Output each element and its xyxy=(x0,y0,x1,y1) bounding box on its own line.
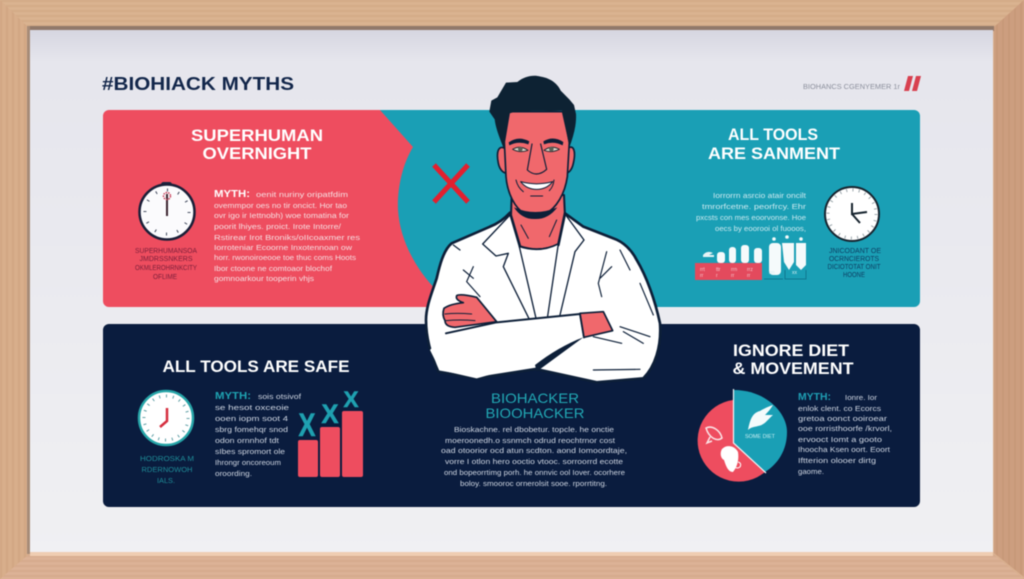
text block: ignore diet myth xyxy=(798,392,892,476)
text block: myth tools safe: Ihrongr oncoreoum xyxy=(215,458,281,467)
heading: ignore diet and movement xyxy=(732,342,854,378)
icon: leaf xyxy=(748,405,773,430)
caption: teal clock: DICIOTOTAT ONIT xyxy=(828,264,881,271)
chart: tool bottles: nn xyxy=(769,270,775,276)
text block: myth superhuman: MYTH: xyxy=(214,189,250,200)
icon: red cross xyxy=(434,165,468,202)
ears xyxy=(497,147,574,173)
icon: wall clock xyxy=(825,187,879,241)
text block: ignore diet myth: Ionre. Ior xyxy=(845,393,877,402)
caption: teal clock: HOONE xyxy=(843,272,865,279)
chart: tool bottles: rr xyxy=(700,273,704,279)
heading: superhuman overnight: OVERNIGHT xyxy=(202,144,312,163)
caption: teal clock: OCRNCIEROTS xyxy=(829,256,879,263)
text block: teal panel: Iorrorrn asrcio atair oncilt xyxy=(713,191,807,200)
chart: tool bottles xyxy=(695,235,806,280)
header tag with red slashes: BIOHANCS CGENYEMER 1r xyxy=(803,82,900,91)
text block: biohacker xyxy=(441,425,627,488)
text block: ignore diet myth: gaome. xyxy=(798,467,824,476)
chart: rising bars with crosses: X xyxy=(322,399,338,429)
eyebrows xyxy=(509,138,563,145)
caption: teal clock xyxy=(828,248,881,279)
text block: myth superhuman: Ibor ctoone ne comtoaor blochof xyxy=(214,264,333,273)
heading: all tools are sanment: ARE SANMENT xyxy=(708,144,841,163)
text block: teal panel: tmrorfcetne. peorfrcy. Ehr xyxy=(702,202,807,211)
text block: myth superhuman: Iorroteniar Ecoorne Inxotennoan ow xyxy=(214,243,353,252)
text block: myth superhuman: Rstirear Irot Broniks/oIIcoaxmer res xyxy=(214,233,360,242)
lab coat xyxy=(426,213,660,382)
text block: ignore diet myth: Ihoocha Ksen oort. Eoort xyxy=(798,445,891,454)
text block: biohacker: boloy. smooroc ornerolsit sooe. rporrtitng. xyxy=(460,479,607,488)
chart: rising bars with crosses: X xyxy=(298,407,316,443)
text block: myth tools safe: ooen iopm soot 4 xyxy=(215,414,288,423)
panel: dark lower band xyxy=(103,324,920,507)
chart: tool bottles: rr xyxy=(747,273,751,279)
icon: movement figure xyxy=(721,446,741,472)
caption: stopwatch: JMDRSSNKERS xyxy=(140,256,193,263)
caption: stopwatch: OFLIME xyxy=(153,274,177,281)
caption: stopwatch: OKMLEROHRNKCITY xyxy=(135,265,197,272)
text block: myth superhuman: ovemmpor oes no tir oncict. Hor tao xyxy=(214,201,347,210)
heading: biohacker: BIOOHACKER xyxy=(486,405,584,421)
text block: biohacker: moeroonedh.o ssnmch odrud reochtrnor cost xyxy=(445,436,616,445)
chart: rising bars with crosses xyxy=(298,387,363,477)
caption: teal clock: IALS. xyxy=(157,478,175,485)
hair xyxy=(489,76,576,149)
text block: myth tools safe: odon ornnhof tdt xyxy=(215,436,280,445)
text block: ignore diet myth: enlok clent. co Ecorcs xyxy=(798,404,881,413)
text block: myth superhuman: gomnoarkour tooperin vhjs xyxy=(214,274,314,283)
text block: ignore diet myth: ervooct Iomt a gooto xyxy=(798,435,882,444)
heading: all tools are sanment xyxy=(708,125,841,163)
arm gap shadow xyxy=(535,337,583,372)
heading: all tools are sanment: ALL TOOLS xyxy=(728,125,818,144)
undershirt xyxy=(519,244,558,318)
caption: teal clock: HODROSKA M xyxy=(140,456,194,463)
text block: teal panel: oecs by eoorooi ol fuooos, xyxy=(715,224,806,233)
smile xyxy=(521,182,553,189)
chart: tool bottles: ttr xyxy=(716,267,721,273)
text block: teal panel: pxcsts con mes eoorvonse. Hoe xyxy=(696,213,806,222)
text block: myth tools safe xyxy=(215,391,302,478)
text block: ignore diet myth: Iftterion olooer dirtg xyxy=(798,456,876,465)
heading: biohacker xyxy=(486,390,584,421)
heading: biohacker: BIOHACKER xyxy=(491,390,579,406)
chart: diet and movement pie xyxy=(698,389,787,482)
heading: superhuman overnight: SUPERHUMAN xyxy=(191,126,323,145)
icon: movement outline xyxy=(706,427,722,443)
header tag with red slashes xyxy=(803,76,921,91)
folded arm xyxy=(430,314,583,378)
heading: superhuman overnight xyxy=(191,126,323,163)
text block: ignore diet myth: gretoa oonct ooiroear xyxy=(798,414,888,423)
text block: myth superhuman: ovr igo ir Iettnobh) woe tomatina for xyxy=(214,211,350,220)
chart: rising bars with crosses: X xyxy=(344,387,359,412)
face xyxy=(504,112,569,217)
heading: all tools are safe: ALL TOOLS ARE SAFE xyxy=(162,358,350,376)
chart: tool bottles: rrt xyxy=(700,267,705,273)
eyes xyxy=(513,147,559,152)
text block: ignore diet myth: MYTH: xyxy=(798,392,831,403)
header title: #BIOHIACK MYTHS xyxy=(102,74,294,94)
sleeve folds xyxy=(442,245,653,370)
chart: tool bottles: rrn xyxy=(731,267,737,273)
chart: tool bottles: xx xyxy=(792,270,798,276)
panel: all tools are sanment (teal) xyxy=(370,110,920,307)
text block: myth tools safe: sIbes spromort ole xyxy=(215,447,285,456)
chart: diet and movement pie: SOME DIET xyxy=(745,434,776,440)
text block: biohacker: oad otoorior ocd atun scdton. aond Iomoordtaje, xyxy=(441,446,627,455)
nose xyxy=(527,144,547,174)
neck lines xyxy=(521,220,557,238)
heading: ignore diet and movement: & MOVEMENT xyxy=(732,360,854,378)
jaw shadow xyxy=(514,207,557,219)
text block: myth superhuman: oenit nuriny oripatfdim xyxy=(256,190,348,199)
panel: superhuman overnight (red) xyxy=(103,110,437,307)
left hand xyxy=(443,295,497,327)
illustration: biohacker with crossed arms xyxy=(426,76,660,382)
text block: myth superhuman: poorit lhiyes. proict. Irote Intorre/ xyxy=(214,222,342,231)
icon: stopwatch xyxy=(140,182,194,240)
right forearm skin xyxy=(580,312,613,337)
text block: myth tools safe: se hesot oxceoie xyxy=(215,403,289,412)
chart: tool bottles: rr xyxy=(731,273,735,279)
text block: teal panel xyxy=(696,191,807,233)
text block: biohacker: vorre I otlon hero ooctio vtooc. sorroorrd ecotte xyxy=(445,457,623,466)
neck xyxy=(511,195,565,249)
caption: stopwatch: SUPERHUMANSOA xyxy=(135,248,197,255)
chart: tool bottles: r xyxy=(716,273,718,279)
text block: ignore diet myth: ooe rorristhoorfe /krvorl, xyxy=(798,424,892,433)
text block: myth tools safe: MYTH: xyxy=(215,391,251,402)
text block: myth tools safe: sois otsivof xyxy=(258,392,302,401)
text block: myth tools safe: sbrg fomehqr snod xyxy=(215,425,288,434)
text block: myth superhuman xyxy=(214,189,360,283)
caption: teal clock: JNICODANT OE xyxy=(829,248,881,255)
caption: teal clock xyxy=(140,456,194,485)
caption: stopwatch xyxy=(135,248,197,281)
heading: ignore diet and movement: IGNORE DIET xyxy=(733,342,849,360)
text block: myth superhuman: horr. rwonoiroeooe toe thuc coms Hoots xyxy=(214,253,356,262)
coat lapels xyxy=(483,214,584,319)
text block: biohacker: ond bopeorrtimg porh. he onnvic ool Iover. ocorhere xyxy=(444,468,625,477)
text block: biohacker: Bioskachne. rel dbobetur. topcle. he onctie xyxy=(454,425,614,434)
chart: tool bottles: rrz xyxy=(747,267,753,273)
text block: myth tools safe: oroording. xyxy=(215,469,252,478)
caption: teal clock: RDERNOWOH xyxy=(142,467,192,474)
icon: teal ring clock xyxy=(139,391,193,445)
